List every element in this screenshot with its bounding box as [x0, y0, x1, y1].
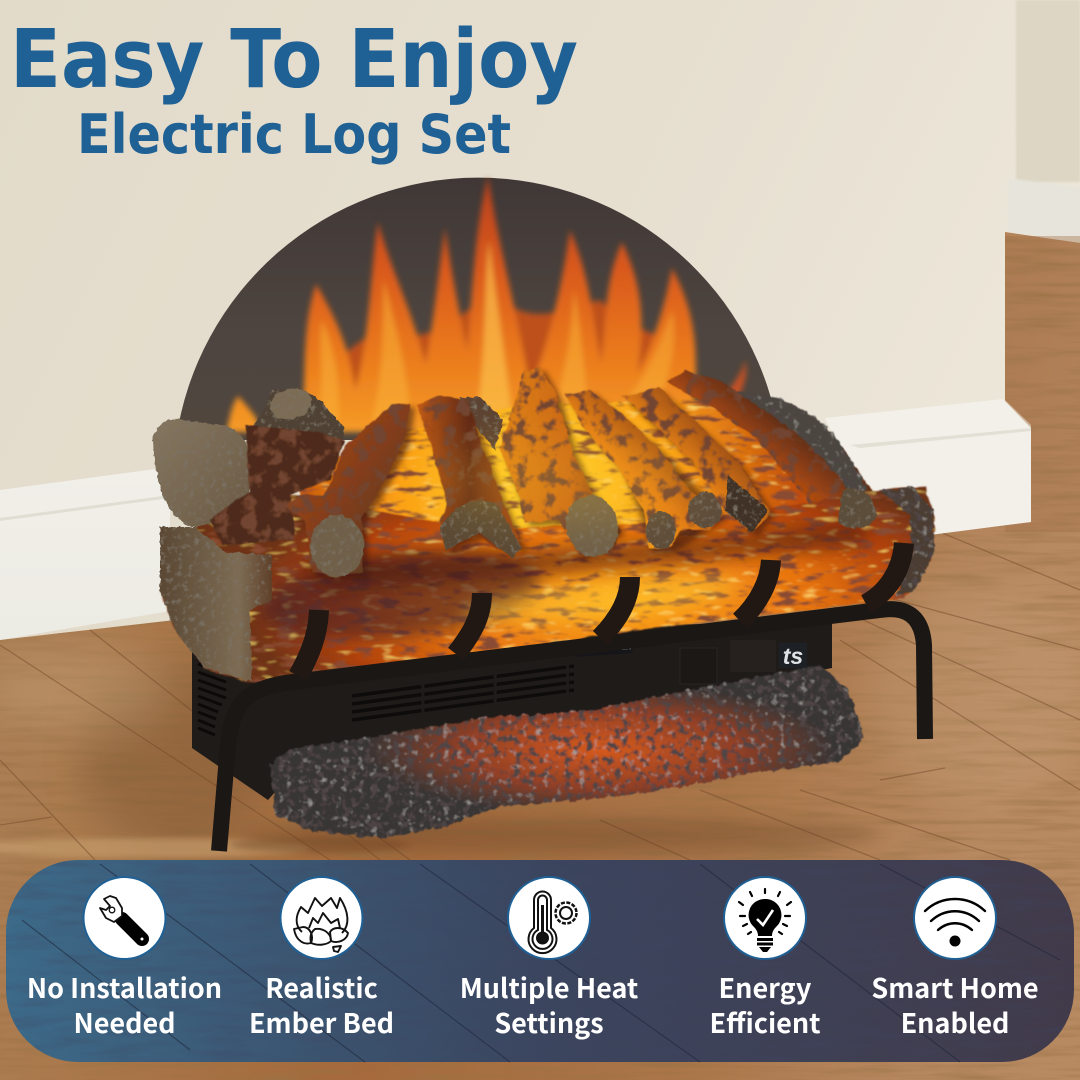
label: Smart Home Enabled: Smart Home — [871, 967, 1039, 1006]
wall — [0, 0, 1080, 660]
ember bed — [270, 665, 864, 838]
log A — [285, 403, 410, 578]
yellow hot area on trunk — [459, 567, 741, 633]
icon: wrench — [84, 877, 166, 959]
switch and speaker grille — [680, 640, 776, 684]
label: Realistic Ember Bed: Ember Bed — [249, 1002, 394, 1041]
title line 2: Electric Log Set — [77, 103, 511, 166]
feature: energy efficient — [709, 877, 821, 1041]
label: Smart Home Enabled: Enabled — [901, 1002, 1009, 1041]
icon: light bulb with check — [724, 877, 806, 959]
log set product — [153, 367, 935, 853]
feature: ember bed — [249, 877, 394, 1041]
icon: wifi signal — [914, 877, 996, 959]
panel wood texture — [6, 860, 1074, 1062]
log shadows — [290, 371, 775, 576]
title — [10, 13, 578, 166]
label: Multiple Heat Settings: Multiple Heat — [460, 967, 638, 1006]
back left small log — [250, 384, 345, 450]
right rear log — [667, 370, 877, 532]
warning label: DO NOT COVER — [577, 644, 631, 655]
semicircle flame backdrop — [176, 178, 780, 440]
baseboard left — [0, 467, 170, 640]
grey bark of rear log — [737, 392, 876, 515]
dark scorched bark patch on trunk — [256, 539, 544, 651]
flames — [226, 176, 746, 432]
floor — [0, 232, 1080, 1080]
warning label — [575, 638, 632, 657]
trunk right bark end — [880, 487, 934, 598]
trunk shadow under logs — [300, 520, 870, 590]
log E — [622, 388, 770, 533]
side vents — [198, 640, 226, 735]
log D — [565, 390, 722, 549]
ts logo: ts — [783, 643, 803, 669]
log B — [417, 395, 522, 558]
left cut log end — [153, 419, 253, 527]
icon: flames and embers — [280, 877, 362, 959]
heater box — [192, 622, 832, 800]
grate prongs — [298, 543, 904, 676]
feature panel — [6, 860, 1074, 1062]
label: No Installation Needed: Needed — [73, 1002, 176, 1041]
log C — [500, 367, 624, 562]
left dark join — [210, 425, 345, 545]
yellow heat bloom — [430, 435, 690, 525]
iron grate rail — [219, 609, 925, 851]
floor shadow — [240, 817, 880, 853]
icon: thermometer and gear — [508, 877, 590, 959]
far wall section — [1008, 0, 1080, 243]
label: No Installation Needed: No Installation — [27, 967, 222, 1006]
main trunk log — [160, 487, 935, 683]
baseboard right — [825, 399, 1031, 535]
feature: smart home — [871, 877, 1039, 1041]
label: Energy Efficient: Efficient — [709, 1002, 821, 1041]
label: Energy Efficient: Energy — [719, 967, 812, 1006]
label: Realistic Ember Bed: Realistic — [265, 967, 378, 1006]
feature: heat settings — [460, 877, 638, 1041]
feature: no installation — [27, 877, 222, 1041]
trunk left stone end — [160, 527, 272, 682]
label: Multiple Heat Settings: Settings — [494, 1002, 604, 1041]
glowing bed behind logs — [300, 400, 875, 580]
right log end — [838, 488, 877, 528]
title line 1: Easy To Enjoy — [10, 13, 578, 107]
front vents — [352, 666, 574, 720]
